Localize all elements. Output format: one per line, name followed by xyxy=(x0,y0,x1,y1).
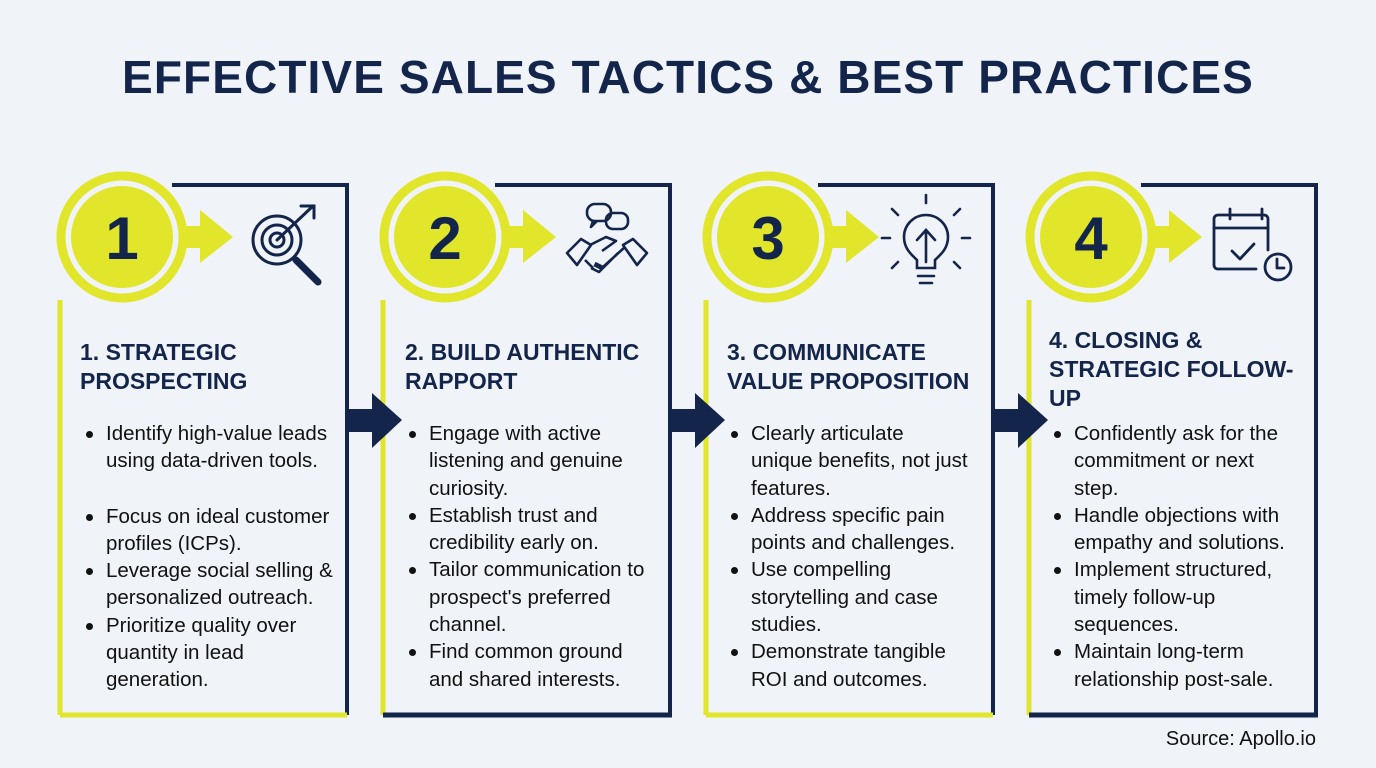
bullets: card 3: studies. xyxy=(751,613,822,636)
heading: card 1: PROSPECTING xyxy=(80,368,247,394)
bullets: card 1: using data-driven tools. xyxy=(106,449,318,472)
icon: lightbulb with arrow xyxy=(882,195,970,283)
heading: card 3: 3. COMMUNICATE xyxy=(727,339,926,365)
numbers: 2 xyxy=(428,205,462,272)
bullets: card 1: Leverage social selling & xyxy=(106,559,333,582)
heading: card 2 xyxy=(405,339,639,394)
bullets: card 2: Engage with active xyxy=(429,422,601,445)
bullets: card 2: and shared interests. xyxy=(429,668,620,691)
bullets: card 2: Tailor communication to xyxy=(429,558,644,581)
bullets: card 2: curiosity. xyxy=(429,477,508,500)
numbers xyxy=(105,205,1108,272)
icon: target with magnifier xyxy=(253,206,318,282)
arrow: card 1 to 2 xyxy=(347,393,402,448)
bullets: card 1: Prioritize quality over xyxy=(106,614,296,637)
bullets: card 4: timely follow-up xyxy=(1074,586,1215,609)
bullets: card 3: Demonstrate tangible xyxy=(751,640,946,663)
bullets: card 3: unique benefits, not just xyxy=(751,449,968,472)
icon: handshake with chat bubbles xyxy=(567,204,647,272)
numbers: 3 xyxy=(751,205,785,272)
bullets: card 4: sequences. xyxy=(1074,613,1179,636)
panel: card 2 frame xyxy=(383,176,672,715)
bullets: card 3: Address specific pain xyxy=(751,504,945,527)
heading: card 2: 2. BUILD AUTHENTIC xyxy=(405,339,639,365)
bullets: card 4: step. xyxy=(1074,477,1118,500)
bullets: card 2: channel. xyxy=(429,613,507,636)
panel: card 1 frame xyxy=(60,176,347,715)
heading: card 4: STRATEGIC FOLLOW- xyxy=(1049,356,1293,382)
bullets: card 2 xyxy=(409,422,644,691)
heading: card 3: VALUE PROPOSITION xyxy=(727,368,969,394)
bullets: card 3: features. xyxy=(751,477,831,500)
bullets: card 4: Confidently ask for the xyxy=(1074,422,1278,445)
bullets: card 3: Clearly articulate xyxy=(751,422,904,445)
heading: card 4: UP xyxy=(1049,385,1081,411)
numbers: 4 xyxy=(1074,205,1108,272)
numbers: 1 xyxy=(105,205,139,272)
bullets: card 2: listening and genuine xyxy=(429,449,623,472)
heading: card 4: 4. CLOSING & xyxy=(1049,327,1202,353)
bullets: card 4: empathy and solutions. xyxy=(1074,531,1285,554)
arrow: card 3 to 4 xyxy=(993,393,1048,448)
bullets: card 2: prospect's preferred xyxy=(429,586,611,609)
panel: card 3 frame xyxy=(706,176,993,715)
heading: card 4 xyxy=(1049,327,1293,411)
bullets: card 2: credibility early on. xyxy=(429,531,599,554)
icon: calendar with clock xyxy=(1214,209,1291,280)
bullets: card 1: profiles (ICPs). xyxy=(106,532,242,555)
bullets: card 4: Implement structured, xyxy=(1074,558,1272,581)
bullets: card 3: points and challenges. xyxy=(751,531,955,554)
panel: card 4 frame xyxy=(1029,176,1318,715)
bullets: card 1: Identify high-value leads xyxy=(106,422,327,445)
bullets: card 3 xyxy=(731,422,968,691)
heading: card 2: RAPPORT xyxy=(405,368,517,394)
arrow: card 2 to 3 xyxy=(670,393,725,448)
heading: card 1 xyxy=(80,339,247,394)
bullets: card 2: Find common ground xyxy=(429,640,623,663)
bullets: card 1: Focus on ideal customer xyxy=(106,505,329,528)
bullets: card 4: relationship post-sale. xyxy=(1074,668,1273,691)
bullets: card 1: generation. xyxy=(106,668,209,691)
source: Source: Apollo.io xyxy=(1166,728,1316,750)
bullets: card 1 xyxy=(86,422,333,691)
bullets: card 4: commitment or next xyxy=(1074,449,1254,472)
bullets: card 1: quantity in lead xyxy=(106,641,244,664)
bullets: card 4: Maintain long-term xyxy=(1074,640,1244,663)
bullets: card 2: Establish trust and xyxy=(429,504,598,527)
bullets: card 1: personalized outreach. xyxy=(106,586,313,609)
bullets: card 4 xyxy=(1054,422,1285,691)
bullets: card 3: storytelling and case xyxy=(751,586,938,609)
heading: card 1: 1. STRATEGIC xyxy=(80,339,237,365)
bullets: card 4: Handle objections with xyxy=(1074,504,1279,527)
title: EFFECTIVE SALES TACTICS & BEST PRACTICES xyxy=(122,51,1254,103)
bullets: card 3: Use compelling xyxy=(751,558,891,581)
bullets: card 3: ROI and outcomes. xyxy=(751,668,928,691)
heading: card 3 xyxy=(727,339,969,394)
